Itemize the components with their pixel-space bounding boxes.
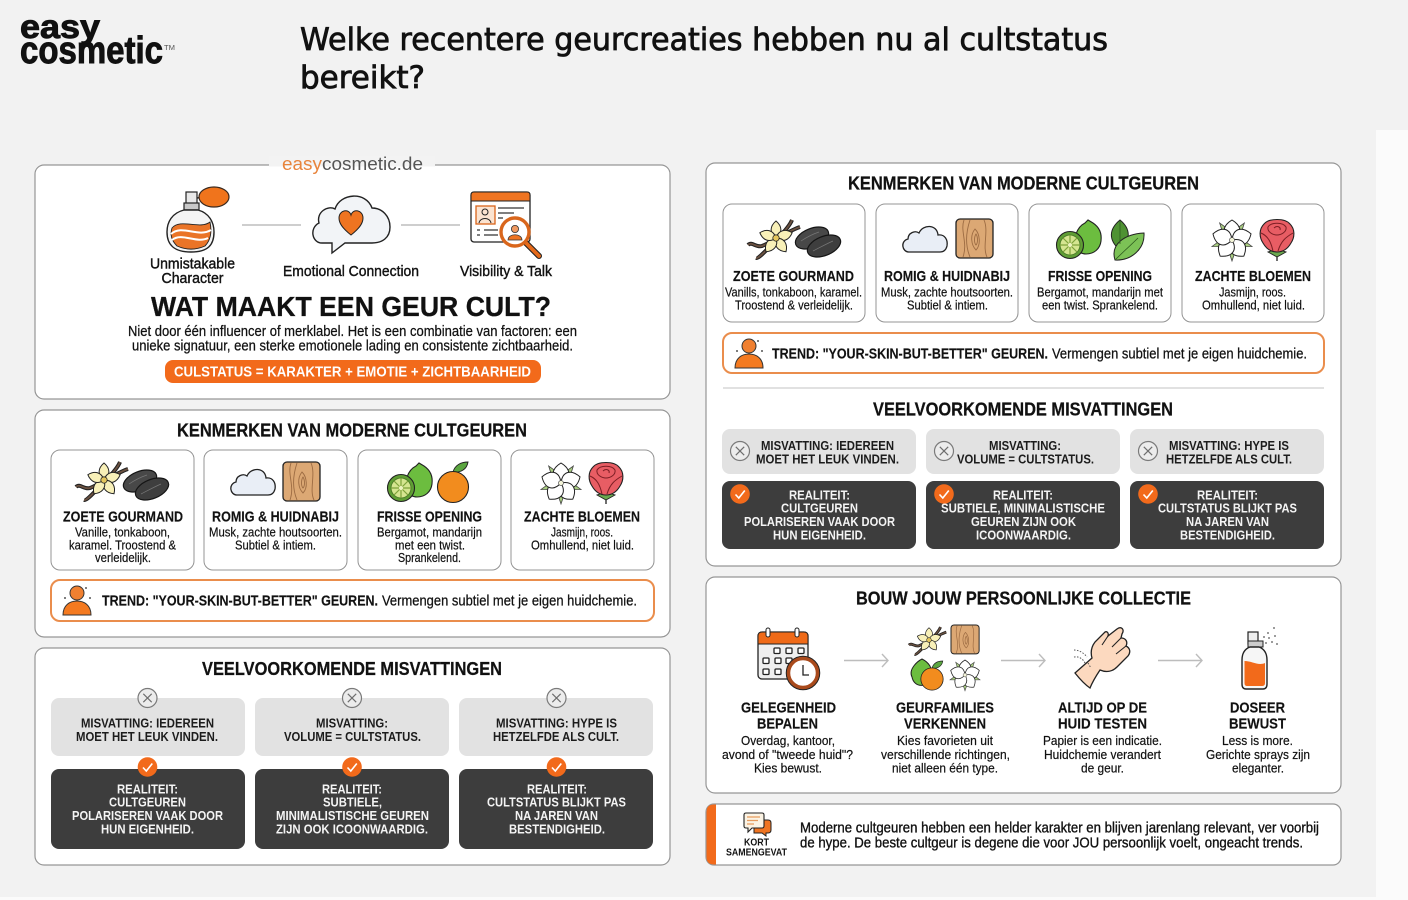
card: zachte bloemen: ZACHTE BLOEMEN bbox=[1195, 268, 1311, 285]
card: frisse opening: FRISSE OPENING bbox=[377, 508, 482, 526]
card: zoete gourmand: verleidelijk. bbox=[95, 550, 151, 565]
trend callout: Vermengen subtiel met je eigen huidchemie. bbox=[382, 594, 637, 610]
trend callout: TREND: "YOUR-SKIN-BUT-BETTER" GEUREN. bbox=[772, 346, 1048, 362]
realiteit 3: REALITEIT: bbox=[527, 781, 587, 796]
misvatting 3 bbox=[1130, 429, 1324, 474]
icon: hand on wrist bbox=[1074, 628, 1130, 688]
realiteit 1: CULTGEUREN bbox=[109, 795, 186, 810]
realiteit 1 bbox=[722, 481, 916, 549]
card: zachte bloemen: Jasmijn, roos. bbox=[1219, 284, 1286, 299]
icon: browser with magnifier bbox=[471, 192, 539, 256]
realiteit 2: REALITEIT: bbox=[993, 487, 1053, 502]
arrow bbox=[1158, 654, 1202, 667]
card: frisse opening: Sprankelend. bbox=[398, 550, 461, 565]
step 3 text: Huidchemie verandert bbox=[1044, 747, 1161, 762]
panel: kenmerken links bbox=[35, 410, 670, 637]
step 2 text: verschillende richtingen, bbox=[881, 747, 1010, 762]
step 1 text bbox=[722, 699, 853, 775]
misvatting 3: MISVATTING: HYPE IS bbox=[496, 716, 617, 731]
realiteit 3 bbox=[459, 757, 653, 849]
label: unmistakable character bbox=[150, 256, 235, 287]
card: zoete gourmand: ZOETE GOURMAND bbox=[733, 268, 854, 285]
heading: BOUW JOUW PERSOONLIJKE COLLECTIE bbox=[856, 587, 1191, 608]
step 3 text: Papier is een indicatie. bbox=[1043, 733, 1162, 748]
card: romig en huidnabij bbox=[876, 204, 1018, 322]
step 4 text bbox=[1206, 699, 1310, 775]
card: romig en huidnabij: ROMIG & HUIDNABIJ bbox=[212, 508, 339, 526]
icon: spray bottle bbox=[1242, 627, 1278, 689]
step 3 text bbox=[1043, 699, 1162, 775]
connector line bbox=[401, 224, 460, 226]
arrow bbox=[844, 654, 888, 667]
panel: kenmerken en misvattingen rechts bbox=[706, 163, 1341, 566]
misvatting 3 bbox=[459, 688, 653, 756]
card: frisse opening bbox=[358, 450, 501, 570]
misvatting 2: VOLUME = CULTSTATUS. bbox=[284, 729, 421, 744]
card: zoete gourmand: ZOETE GOURMAND bbox=[63, 508, 183, 526]
connector line bbox=[242, 224, 301, 226]
logo: easy cosmetic: cosmetic bbox=[20, 30, 163, 72]
intro text: Niet door één influencer of merklabel. Het is een combinatie van factoren: een bbox=[128, 324, 577, 340]
card: zachte bloemen: Omhullend, niet luid. bbox=[531, 538, 634, 552]
formula pill: CULSTATUS = KARAKTER + EMOTIE + ZICHTBAARHEID bbox=[174, 364, 531, 380]
label: kort samengevat: SAMENGEVAT bbox=[726, 847, 787, 859]
label: emotional connection: Emotional Connection bbox=[283, 263, 419, 280]
label: unmistakable character: Character bbox=[162, 270, 224, 287]
step 3 text: ALTIJD OP DE bbox=[1058, 699, 1147, 716]
realiteit 2: ZIJN OOK ICOONWAARDIG. bbox=[276, 821, 428, 836]
intro text: unieke signatuur, een sterke emotionele lading en consistente zichtbaarheid. bbox=[132, 339, 573, 355]
step 2 text: GEURFAMILIES bbox=[896, 699, 994, 716]
step 4 text: DOSEER bbox=[1230, 699, 1285, 716]
card: zoete gourmand: Troostend & verleidelijk. bbox=[735, 297, 853, 312]
misvatting 1: MOET HET LEUK VINDEN. bbox=[756, 451, 899, 466]
panel: misvattingen links bbox=[35, 648, 670, 865]
realiteit 3: CULTSTATUS BLIJKT PAS bbox=[1158, 501, 1297, 516]
realiteit 1: REALITEIT: bbox=[117, 781, 178, 796]
misvatting 3: MISVATTING: HYPE IS bbox=[1169, 438, 1289, 453]
icon: perfume bottle bbox=[167, 187, 229, 252]
realiteit 3: NA JAREN VAN bbox=[515, 808, 598, 823]
trend callout bbox=[51, 580, 654, 621]
label: kort samengevat bbox=[726, 837, 787, 859]
icon: chat bubbles bbox=[744, 813, 771, 836]
misvatting 1 bbox=[722, 429, 916, 474]
realiteit 1: POLARISEREN VAAK DOOR bbox=[744, 514, 896, 529]
misvatting 1: MISVATTING: IEDEREEN bbox=[761, 438, 894, 453]
misvatting 2: MISVATTING: bbox=[989, 438, 1061, 453]
card: frisse opening: Bergamot, mandarijn met bbox=[1037, 284, 1163, 299]
realiteit 2 bbox=[255, 757, 449, 849]
card: frisse opening bbox=[1029, 204, 1171, 322]
realiteit 2: ICOONWAARDIG. bbox=[976, 527, 1071, 542]
card: romig en huidnabij: Musk, zachte houtsoorten. bbox=[881, 284, 1013, 299]
card: zoete gourmand bbox=[723, 204, 865, 322]
step 4 text: eleganter. bbox=[1232, 760, 1284, 775]
step 2 text: VERKENNEN bbox=[904, 715, 986, 732]
step 3 text: de geur. bbox=[1081, 760, 1124, 775]
realiteit 2 bbox=[926, 481, 1120, 549]
icon: fragrance families bbox=[909, 625, 981, 691]
realiteit 1: POLARISEREN VAAK DOOR bbox=[72, 808, 224, 823]
misvatting 1: MOET HET LEUK VINDEN. bbox=[76, 729, 218, 744]
realiteit 1: CULTGEUREN bbox=[781, 501, 858, 516]
card: zoete gourmand: Vanille, tonkaboon, bbox=[75, 524, 170, 540]
card: zachte bloemen bbox=[1182, 204, 1324, 322]
realiteit 3: REALITEIT: bbox=[1197, 487, 1258, 502]
logo: easy cosmetic: TM bbox=[164, 45, 175, 52]
card: zachte bloemen: Jasmijn, roos. bbox=[551, 524, 613, 540]
icon: cloud with heart bbox=[313, 196, 390, 253]
card: romig en huidnabij: Musk, zachte houtsoorten. bbox=[209, 524, 342, 540]
step 4 text: BEWUST bbox=[1229, 715, 1286, 732]
realiteit 2: GEUREN ZIJN OOK bbox=[971, 514, 1077, 529]
card: romig en huidnabij: Subtiel & intiem. bbox=[235, 538, 316, 552]
realiteit 2: SUBTIELE, MINIMALISTISCHE bbox=[941, 501, 1105, 516]
card: frisse opening: een twist. Sprankelend. bbox=[1042, 297, 1158, 312]
misvatting 2 bbox=[255, 688, 449, 756]
card: zachte bloemen bbox=[511, 450, 654, 570]
realiteit 1: REALITEIT: bbox=[789, 487, 850, 502]
label: visibility and talk: Visibility & Talk bbox=[460, 263, 552, 280]
misvatting 1 bbox=[51, 688, 245, 756]
summary text: Moderne cultgeuren hebben een helder karakter en blijven jarenlang relevant, ver voorbij bbox=[800, 819, 1319, 836]
intro text bbox=[128, 324, 577, 355]
card: zachte bloemen: ZACHTE BLOEMEN bbox=[524, 508, 640, 526]
step 1 text: Kies bewust. bbox=[754, 760, 822, 775]
card: romig en huidnabij bbox=[204, 450, 347, 570]
realiteit 2: SUBTIELE, bbox=[323, 795, 382, 810]
step 2 text bbox=[881, 699, 1010, 775]
card: zoete gourmand: karamel. Troostend & bbox=[69, 538, 176, 552]
card: romig en huidnabij: Subtiel & intiem. bbox=[907, 297, 988, 312]
step 1 text: GELEGENHEID bbox=[741, 699, 836, 716]
page title bbox=[300, 22, 1108, 96]
formula pill bbox=[165, 360, 541, 383]
step 4 text: Gerichte sprays zijn bbox=[1206, 747, 1310, 762]
logo: easy cosmetic: easy bbox=[20, 8, 101, 45]
realiteit 1: HUN EIGENHEID. bbox=[101, 821, 194, 836]
panel: kort samengevat bbox=[706, 804, 1341, 865]
trend callout bbox=[723, 333, 1324, 373]
icon: calendar with clock bbox=[758, 628, 818, 688]
heading: KENMERKEN VAN MODERNE CULTGEUREN bbox=[848, 172, 1199, 193]
misvatting 3: HETZELFDE ALS CULT. bbox=[1166, 451, 1292, 466]
card: zachte bloemen: Omhullend, niet luid. bbox=[1202, 297, 1305, 312]
panel: bouw jouw collectie bbox=[706, 577, 1341, 793]
brand url: easycosmetic.de bbox=[282, 154, 423, 174]
page title: bereikt? bbox=[300, 60, 425, 96]
arrow bbox=[1001, 654, 1045, 667]
card: zoete gourmand: Vanills, tonkaboon, karamel. bbox=[725, 284, 862, 299]
realiteit 1: HUN EIGENHEID. bbox=[773, 527, 866, 542]
summary text: de hype. De beste cultgeur is degene die voor JOU persoonlijk voelt, ongeacht trends. bbox=[800, 835, 1303, 852]
realiteit 3: NA JAREN VAN bbox=[1186, 514, 1269, 529]
trend callout: TREND: "YOUR-SKIN-BUT-BETTER" GEUREN. bbox=[102, 594, 378, 610]
label: unmistakable character: Unmistakable bbox=[150, 256, 235, 272]
step 2 text: niet alleen één type. bbox=[892, 760, 998, 775]
misvatting 2: MISVATTING: bbox=[316, 716, 388, 731]
realiteit 2: REALITEIT: bbox=[322, 781, 382, 796]
summary text bbox=[800, 819, 1319, 852]
realiteit 3: BESTENDIGHEID. bbox=[509, 821, 605, 836]
panel: wat maakt een geur cult bbox=[35, 154, 670, 399]
realiteit 2: MINIMALISTISCHE GEUREN bbox=[276, 808, 429, 823]
step 1 text: avond of "tweede huid"? bbox=[722, 747, 853, 762]
misvatting 1: MISVATTING: IEDEREEN bbox=[81, 716, 214, 731]
heading: KENMERKEN VAN MODERNE CULTGEUREN bbox=[177, 420, 527, 441]
realiteit 3: BESTENDIGHEID. bbox=[1180, 527, 1275, 542]
step 1 text: BEPALEN bbox=[757, 715, 818, 732]
heading: VEELVOORKOMENDE MISVATTINGEN bbox=[873, 399, 1173, 420]
logo: easy cosmetic bbox=[20, 8, 175, 72]
step 2 text: Kies favorieten uit bbox=[897, 733, 993, 748]
misvatting 3: HETZELFDE ALS CULT. bbox=[493, 729, 619, 744]
card: zoete gourmand bbox=[51, 450, 194, 570]
misvatting 2 bbox=[926, 429, 1120, 474]
heading: wat maakt een geur cult: WAT MAAKT EEN GEUR CULT? bbox=[151, 291, 551, 322]
card: frisse opening: met een twist. bbox=[395, 538, 465, 552]
realiteit 3: CULTSTATUS BLIJKT PAS bbox=[487, 795, 626, 810]
card: frisse opening: FRISSE OPENING bbox=[1048, 268, 1152, 285]
label: kort samengevat: KORT bbox=[744, 837, 769, 849]
misvatting 2: VOLUME = CULTSTATUS. bbox=[957, 451, 1094, 466]
step 1 text: Overdag, kantoor, bbox=[741, 733, 835, 748]
heading: VEELVOORKOMENDE MISVATTINGEN bbox=[202, 658, 502, 679]
card: frisse opening: Bergamot, mandarijn bbox=[377, 524, 482, 540]
step 3 text: HUID TESTEN bbox=[1058, 715, 1147, 732]
realiteit 1 bbox=[51, 757, 245, 849]
realiteit 3 bbox=[1130, 481, 1324, 549]
page title: Welke recentere geurcreaties hebben nu al cultstatus bbox=[300, 22, 1108, 58]
trend callout: Vermengen subtiel met je eigen huidchemie. bbox=[1052, 346, 1307, 362]
step 4 text: Less is more. bbox=[1222, 733, 1293, 748]
card: romig en huidnabij: ROMIG & HUIDNABIJ bbox=[884, 268, 1010, 285]
